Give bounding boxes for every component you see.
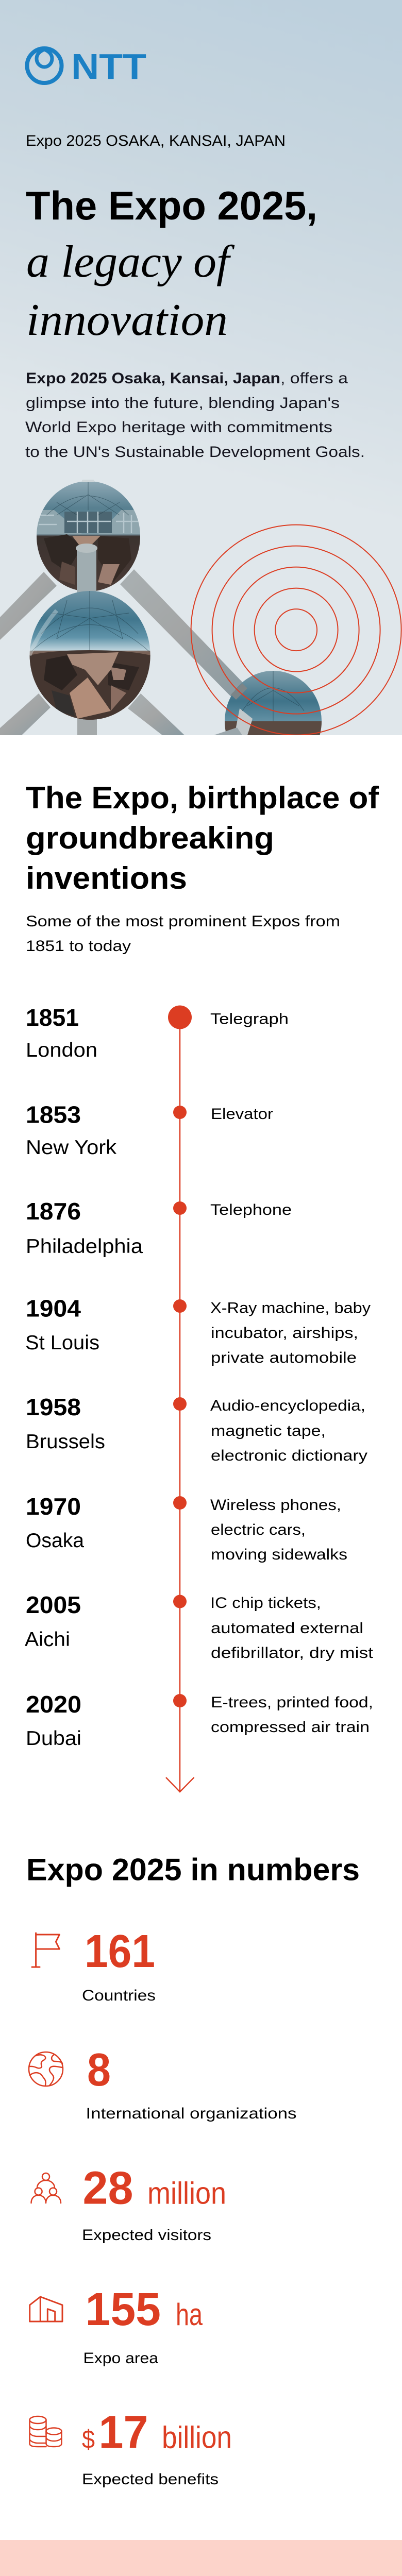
- title: The Expo 2025,: [26, 183, 317, 228]
- stat: organizations: International organizations: [86, 2105, 297, 2122]
- timeline heading: groundbreaking: [26, 821, 274, 855]
- icon: people: [31, 2173, 61, 2203]
- stat: area: ha: [176, 2297, 203, 2332]
- entry: 2005: 2005: [26, 1591, 81, 1618]
- intro text: , offers a: [280, 370, 348, 387]
- entry: 1970: moving sidewalks: [211, 1546, 347, 1563]
- entry: 2020: Dubai: [26, 1727, 81, 1750]
- entry: 1853: [26, 1101, 273, 1159]
- eyebrow: Expo 2025 OSAKA, KANSAI, JAPAN: [26, 132, 286, 149]
- entry: 2020: 2020: [26, 1691, 81, 1718]
- entry: 1958: Audio-encyclopedia,: [210, 1397, 365, 1414]
- intro text: World Expo heritage with commitments: [25, 419, 332, 436]
- stat: countries: 161: [85, 1926, 155, 1977]
- entry: 1876: Philadelphia: [26, 1235, 143, 1258]
- icon: coins: [30, 2416, 62, 2447]
- stat: area: Expo area: [83, 2350, 158, 2367]
- stat: visitors: million: [147, 2176, 226, 2210]
- entry: 1876: 1876: [26, 1198, 81, 1225]
- entry: 1958: [26, 1394, 367, 1464]
- timeline heading: Some of the most prominent Expos from: [26, 913, 340, 930]
- entry: 1853: Elevator: [211, 1106, 273, 1123]
- entry: 1958: Brussels: [26, 1431, 105, 1453]
- heading: numbers: Expo 2025 in numbers: [26, 1853, 360, 1887]
- entry: 1958: magnetic tape,: [211, 1422, 326, 1439]
- entry: 2005: automated external: [211, 1620, 363, 1637]
- entry: 1904: St Louis: [25, 1332, 99, 1354]
- logo: NTT: NTT: [71, 46, 146, 87]
- entry: 1904: X-Ray machine, baby: [210, 1299, 371, 1317]
- entry: 1904: incubator, airships,: [211, 1325, 358, 1342]
- entry: 2005: defibrillator, dry mist: [211, 1645, 374, 1662]
- icon: building: [30, 2297, 62, 2321]
- timeline heading: The Expo, birthplace of: [26, 781, 379, 815]
- stat: benefits: $: [82, 2425, 95, 2453]
- stat: area: [30, 2284, 203, 2367]
- image: Atomium spheres: [0, 480, 323, 772]
- arrow line: [166, 1018, 194, 1792]
- numbers: [29, 1926, 297, 2488]
- stat: benefits: billion: [162, 2420, 232, 2454]
- icon: globe: [29, 2052, 63, 2086]
- stat: countries: [32, 1926, 156, 2004]
- stat: benefits: Expected benefits: [82, 2471, 219, 2488]
- timeline heading: [26, 781, 379, 955]
- concentric rings: [191, 525, 401, 735]
- intro text: Expo 2025 Osaka, Kansai, Japan: [26, 370, 280, 387]
- title: a legacy of: [26, 237, 235, 287]
- stat: area: 155: [86, 2284, 161, 2335]
- stat: benefits: 17: [99, 2407, 148, 2459]
- logo: NTT: [27, 46, 146, 87]
- entry: 1851: Telegraph: [210, 1011, 289, 1027]
- intro text: [25, 370, 365, 461]
- panel: Japan's vision: [0, 2540, 402, 2576]
- timeline heading: inventions: [26, 861, 187, 895]
- timeline heading: 1851 to today: [26, 938, 131, 955]
- entry: 1970: Osaka: [26, 1530, 84, 1552]
- timeline: [25, 1004, 374, 1792]
- stat: benefits: [30, 2407, 232, 2488]
- entry: 1958: 1958: [26, 1394, 81, 1420]
- intro text: to the UN's Sustainable Development Goals.: [25, 444, 365, 461]
- intro text: glimpse into the future, blending Japan's: [26, 395, 340, 412]
- entry: 1958: electronic dictionary: [211, 1447, 367, 1464]
- entry: 1904: [25, 1295, 371, 1366]
- entry: 1970: Wireless phones,: [210, 1497, 341, 1514]
- entry: 1970: electric cars,: [211, 1521, 306, 1538]
- entry: 2005: IC chip tickets,: [210, 1595, 321, 1612]
- stat: organizations: [29, 2044, 297, 2122]
- entry: 2020: [26, 1691, 373, 1750]
- entry: 1876: Telephone: [210, 1201, 292, 1218]
- entry: 1904: 1904: [26, 1295, 81, 1322]
- entry: 1853: New York: [26, 1137, 117, 1159]
- entry: 2020: compressed air train: [211, 1719, 370, 1736]
- icon: flag: [32, 1933, 59, 1967]
- entry: 1853: 1853: [26, 1101, 81, 1128]
- entry: 1904: private automobile: [211, 1349, 357, 1366]
- stat: organizations: 8: [87, 2044, 111, 2096]
- stat: countries: Countries: [82, 1987, 156, 2004]
- entry: 1970: 1970: [26, 1493, 81, 1520]
- title: [26, 183, 317, 345]
- panel: hero: [0, 0, 402, 735]
- entry: 2005: [25, 1591, 374, 1662]
- panel: timeline and numbers: [25, 781, 379, 2488]
- stat: visitors: [31, 2163, 226, 2244]
- stat: visitors: 28: [82, 2163, 133, 2214]
- entry: 1851: [26, 1004, 289, 1061]
- entry: 1876: [26, 1198, 292, 1258]
- entry: 1970: [26, 1493, 347, 1563]
- entry: 2005: Aichi: [25, 1629, 70, 1651]
- entry: 2020: E-trees, printed food,: [211, 1694, 373, 1711]
- entry: 1851: 1851: [26, 1004, 79, 1031]
- title: innovation: [26, 295, 228, 345]
- stat: visitors: Expected visitors: [82, 2227, 211, 2244]
- entry: 1851: London: [26, 1039, 97, 1061]
